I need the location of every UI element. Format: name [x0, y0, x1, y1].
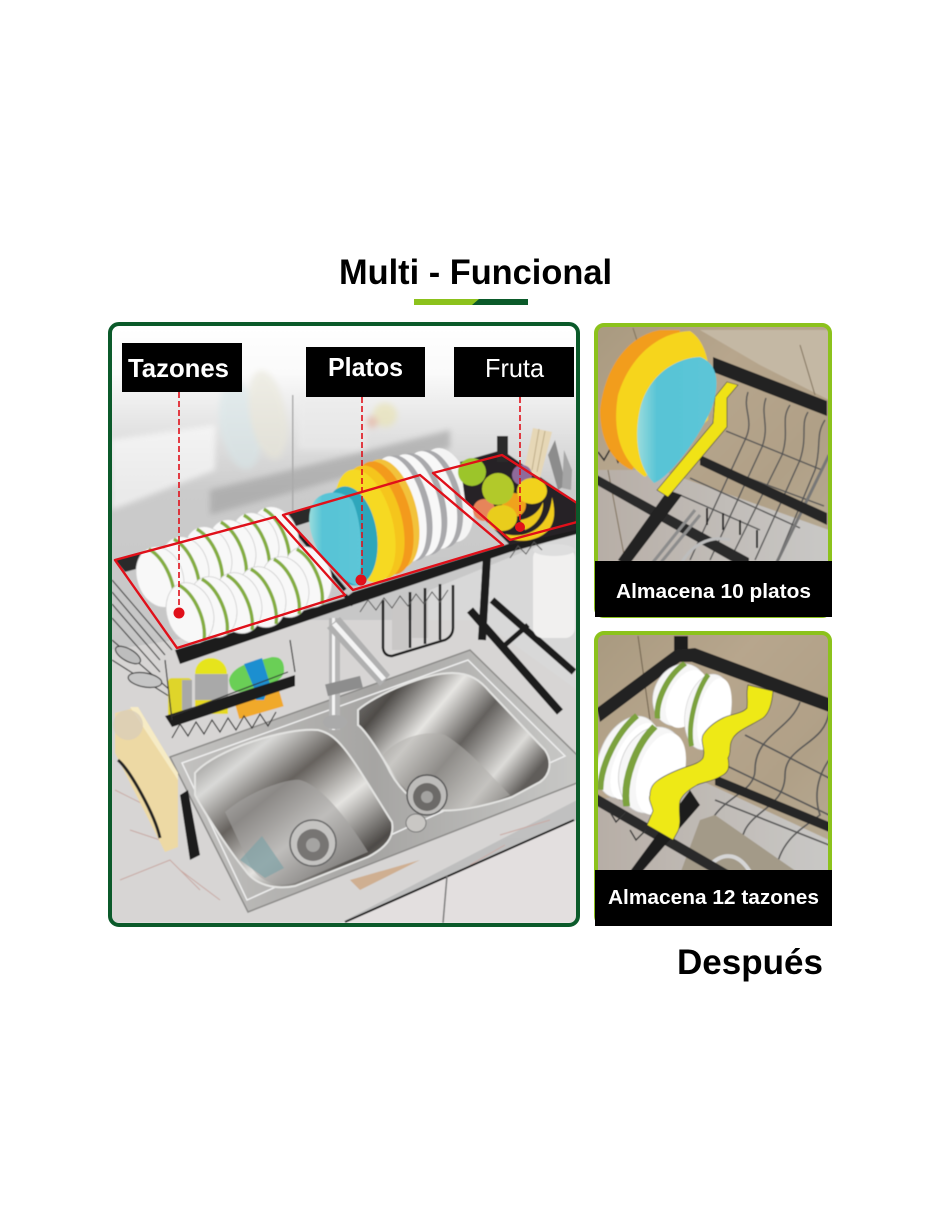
- panel border: [596, 633, 830, 924]
- label: Tazones: [122, 343, 242, 618]
- right basin: [358, 673, 550, 810]
- panel: stores 12 bowls: [584, 633, 832, 926]
- rack bars: [597, 357, 827, 566]
- label: Tazones: Tazones: [128, 353, 229, 383]
- sink edge: [681, 814, 795, 870]
- label: Platos: Platos: [328, 352, 403, 382]
- cutting board: [113, 707, 200, 860]
- orange plate: [600, 330, 680, 470]
- caption bar: [595, 870, 832, 926]
- photo: bowl rack closeup: [584, 634, 829, 874]
- utensil holder: [497, 428, 572, 490]
- plates in rack: [309, 442, 483, 589]
- rack bars: [597, 636, 829, 874]
- rack wires: [680, 392, 829, 566]
- title: Multi - Funcional: [339, 253, 612, 292]
- red outline: bowls section: [115, 517, 345, 648]
- fruit basket: [458, 428, 577, 545]
- red outline: fruit section: [433, 455, 577, 540]
- title underline: [414, 299, 528, 305]
- blue plate: [637, 357, 717, 483]
- rear leg and diagonal stand: [470, 555, 574, 712]
- yellow plate: [616, 331, 710, 477]
- rack frame bars: [117, 508, 576, 664]
- sponge and soap basket: [165, 640, 295, 738]
- cabinet doors: [340, 820, 577, 923]
- wavy wires: [714, 701, 828, 860]
- yellow wavy guide: [647, 685, 773, 840]
- drains: [290, 775, 447, 866]
- label: Platos: [306, 347, 425, 586]
- wall tiles on right: [426, 534, 576, 689]
- photo: plate rack closeup: [597, 326, 829, 566]
- panel border: [110, 324, 578, 925]
- hanging basket under plates: [383, 584, 453, 656]
- steel double sink: [170, 650, 577, 912]
- label: Fruta: [454, 347, 574, 532]
- caption: Después: Después: [677, 943, 823, 982]
- front bowls: [584, 706, 696, 822]
- caption bar: Almacena 10 platos: [616, 581, 811, 603]
- faded wall reflection of rack: [111, 368, 450, 515]
- red outline: plates section: [283, 475, 503, 590]
- back bowls: [643, 655, 738, 754]
- caption bar: Almacena 12 tazones: [608, 887, 819, 909]
- marble countertop: [111, 620, 577, 923]
- faucet: [323, 617, 390, 730]
- paper towel roll: [533, 544, 575, 638]
- left utensils and cups: [112, 580, 175, 700]
- left basin: [195, 730, 393, 887]
- yellow guide stripe: [657, 382, 738, 497]
- panel: main kitchen sink rack: [110, 324, 578, 925]
- label: Fruta: Fruta: [485, 353, 545, 383]
- infographic canvas: [108, 258, 832, 982]
- bowls in rack: [135, 506, 333, 644]
- photo: kitchen scene: [111, 325, 577, 923]
- panel: stores 10 plates: [595, 325, 832, 617]
- overflow button: [406, 814, 426, 832]
- caption bar: [595, 561, 832, 617]
- panel border: [596, 325, 830, 616]
